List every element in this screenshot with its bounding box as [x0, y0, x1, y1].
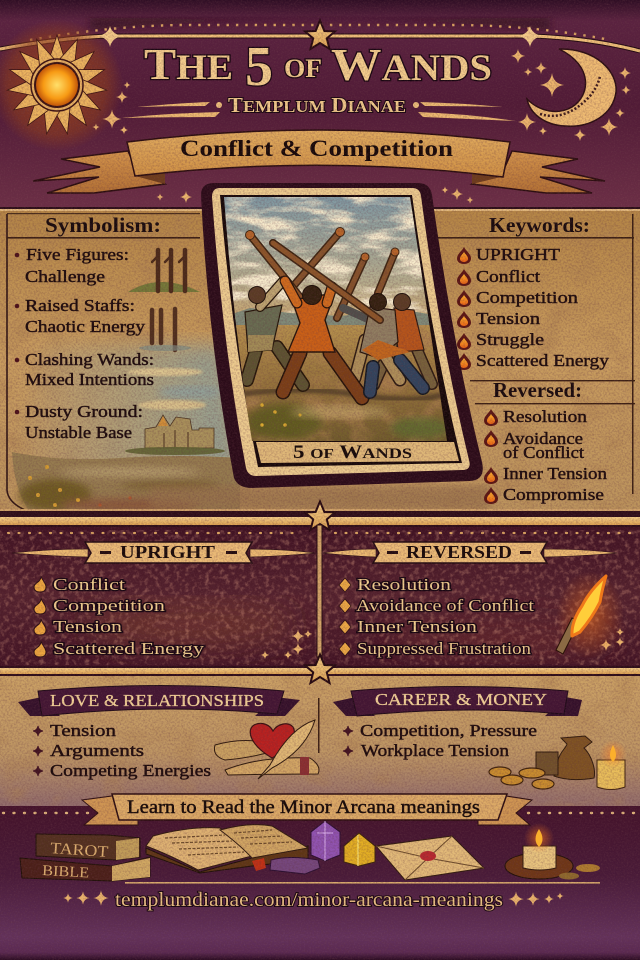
background: footer area — [0, 806, 640, 960]
footer url: templumdianae.com/minor-arcana-meanings — [115, 890, 503, 911]
heading: Symbolism: Symbolism: — [45, 213, 161, 237]
list: love and relationships: Tension — [50, 721, 117, 740]
text block: symbolism list: Raised Staffs: — [25, 296, 135, 315]
text block: symbolism list: Challenge — [25, 267, 105, 286]
list: reversed keywords: Resolution — [503, 407, 588, 426]
list: upright meanings: Competition — [53, 596, 166, 615]
list: career and money — [343, 721, 537, 760]
illustration: books labelled Tarot and Bible — [20, 834, 150, 881]
banner: Upright — [12, 542, 316, 563]
list: career and money: Workplace Tension — [361, 741, 510, 760]
list: upright keywords: Scattered Energy — [476, 351, 610, 370]
divider band with second star — [0, 654, 640, 683]
banner: Learn to Read — [82, 794, 532, 825]
list: love and relationships: Competing Energies — [50, 761, 211, 780]
tarot card: 5 OF W ANDS — [293, 442, 412, 463]
icon: three staffs — [139, 309, 191, 351]
header top border — [0, 18, 640, 51]
flowers in meadow — [28, 465, 132, 507]
list: reversed keywords: Compromise — [503, 485, 604, 504]
text block: symbolism list: Dusty Ground: — [25, 402, 143, 421]
tarot card — [201, 183, 483, 488]
figure: left in green tunic — [245, 281, 303, 385]
background: love and career parchment — [0, 672, 640, 808]
banner: Learn to Read: Learn to Read the Minor Arcana meanings — [127, 797, 480, 818]
panel: keywords — [425, 207, 640, 504]
shelf line — [125, 882, 600, 884]
header sparkles near sun — [92, 81, 131, 134]
header sparkles under banner — [156, 186, 474, 204]
background: symbolism and keywords parchment — [0, 207, 640, 513]
figure: back right in orange — [374, 294, 432, 385]
icon: crescent moon — [511, 49, 631, 141]
list: love and relationships — [33, 721, 211, 780]
banner: Conflict & Competition — [33, 130, 605, 193]
meadow at foot of panel — [12, 452, 240, 512]
panel: symbolism — [0, 207, 240, 512]
list: reversed keywords: Inner Tension — [503, 464, 608, 483]
banner: Reversed: REVERSED — [406, 542, 512, 562]
list: upright meanings: Conflict — [53, 575, 125, 594]
illustration: books labelled Tarot and Bible: TAROT — [50, 840, 109, 861]
list: upright keywords: Conflict — [476, 267, 540, 286]
illustration: crystals and stones — [252, 821, 375, 874]
parchment mottling upper — [0, 209, 640, 511]
list: love and relationships: Arguments — [50, 741, 144, 760]
list: reversed meanings: Suppressed Frustration — [357, 639, 532, 658]
background: top header area — [0, 0, 640, 210]
icon: dish candle flame — [524, 823, 554, 853]
title — [144, 36, 492, 98]
heading: Reversed: Reversed: — [493, 378, 582, 402]
illustration: sealed envelope — [376, 836, 484, 880]
central vertical divider — [317, 525, 322, 657]
list: upright meanings: Scattered Energy — [53, 639, 205, 658]
banner: Career and Money: CAREER & MONEY — [375, 690, 547, 709]
text block: symbolism list: Mixed Intentions — [25, 370, 154, 389]
list: reversed meanings: Inner Tension — [357, 617, 478, 636]
wands — [246, 228, 399, 318]
list: upright meanings: Tension — [53, 617, 123, 636]
list: upright keywords — [457, 245, 610, 370]
icon: sun — [0, 19, 123, 151]
divider band with star — [0, 502, 640, 530]
illustration: candle in dish with coins — [505, 846, 600, 880]
banner: Reversed — [323, 542, 617, 563]
rusty glow in section centre — [85, 601, 610, 658]
list: upright keywords: Tension — [476, 309, 541, 328]
title: THE — [144, 40, 233, 89]
divider between love and career — [318, 698, 320, 753]
list: reversed meanings: Resolution — [357, 575, 452, 594]
icon: three figures with staffs — [128, 250, 200, 292]
banner: Conflict & Competition: Conflict & Competition — [180, 136, 453, 161]
parchment mottling lower — [0, 676, 640, 806]
text block: symbolism list: Five Figures: — [26, 245, 129, 264]
list: reversed keywords: of Conflict — [503, 443, 584, 462]
text block: symbolism list: Chaotic Energy — [25, 317, 146, 336]
illustration: books labelled Tarot and Bible: BIBLE — [42, 863, 90, 881]
list: career and money: Competition, Pressure — [360, 721, 537, 740]
icon: castle — [125, 415, 225, 455]
title: OF — [284, 54, 322, 83]
list: reversed meanings: Avoidance of Conflict — [356, 596, 534, 615]
icon: right candle flame — [599, 740, 627, 768]
subtitle: Templum Dianae: TEMPLUM DIANAE — [228, 93, 406, 117]
figure: right in grey tunic — [343, 294, 423, 392]
clouds on panel — [127, 368, 222, 410]
sparkles around section corners — [261, 628, 625, 659]
figure: center in orange tunic — [283, 281, 362, 398]
list: upright keywords: Competition — [476, 288, 579, 307]
icon: sun disc — [36, 64, 78, 106]
meadow colouring — [19, 468, 220, 512]
text block: symbolism list: Clashing Wands: — [25, 350, 154, 369]
title: 5 — [245, 36, 273, 98]
banner: Love and Relationships: LOVE & RELATIONSHIPS — [50, 691, 264, 710]
icon: heart, scrolls and quill — [214, 720, 319, 779]
list: upright keywords: Struggle — [476, 330, 544, 349]
banner: Love and Relationships — [18, 686, 300, 716]
list: reversed keywords — [484, 407, 608, 504]
banner: Career and Money — [333, 686, 582, 716]
title: WANDS — [331, 39, 492, 90]
text block: symbolism list: Unstable Base — [25, 423, 132, 442]
heading: Keywords: Keywords: — [489, 213, 590, 237]
list: upright meanings — [34, 575, 205, 658]
background: upright and reversed section — [0, 520, 640, 672]
dotted rows beside cta banner — [3, 812, 636, 814]
list: reversed meanings — [339, 575, 534, 658]
icon: coins, money bag and candle — [489, 736, 625, 790]
icon: burning torch — [556, 571, 624, 659]
card label — [256, 442, 459, 463]
list: reversed keywords: Avoidance — [503, 429, 583, 448]
figure: middle tan — [355, 340, 400, 380]
subtitle: Templum Dianae — [122, 93, 516, 121]
strip below card — [150, 486, 490, 510]
card picture — [220, 195, 460, 445]
list: upright keywords: UPRIGHT — [476, 245, 561, 264]
footer url — [63, 890, 564, 911]
speckles in section — [0, 530, 640, 665]
illustration: open book — [146, 825, 308, 873]
banner: Upright: UPRIGHT — [120, 542, 215, 562]
text block: symbolism list — [15, 245, 154, 442]
dotted row in upright section — [8, 532, 636, 534]
